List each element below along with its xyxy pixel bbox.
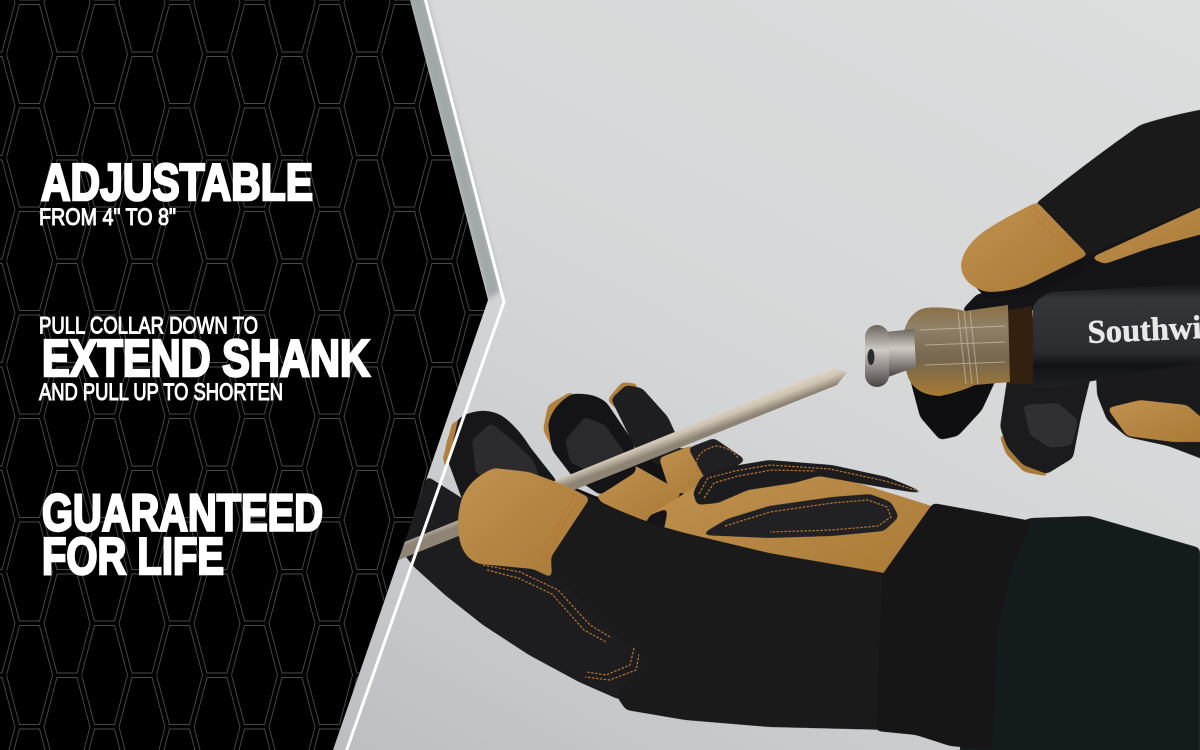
follow-on: AND PULL UP TO SHORTEN: [39, 379, 283, 406]
lower finger stitching: [483, 565, 610, 637]
heading: ADJUSTABLE: [41, 154, 313, 212]
index finger back: [1035, 108, 1200, 256]
text block: extend shank: [39, 312, 370, 406]
palm tan strip: [1090, 203, 1200, 264]
ring finger rim: [607, 382, 640, 420]
heading: EXTEND SHANK: [42, 330, 370, 388]
tip hole: [868, 349, 874, 365]
metal tip: [865, 325, 889, 387]
little finger pad: [688, 438, 746, 484]
wrist cuff: [876, 503, 1032, 750]
black handle: [1033, 284, 1200, 388]
middle finger tan: [596, 465, 682, 522]
thumb: [458, 468, 590, 578]
lower finger three tan: [1107, 400, 1200, 442]
middle finger tan rim: [543, 392, 585, 455]
middle finger black: [548, 394, 636, 495]
little finger tan strip: [659, 445, 712, 494]
shank: [396, 368, 847, 561]
upper pad stitching: [699, 465, 915, 494]
heading line one: GUARANTEED: [42, 484, 323, 542]
fingertip stitching: [1034, 208, 1080, 252]
lower finger one: [905, 360, 1005, 440]
middle finger texture: [565, 417, 630, 472]
panel: black hexagon side panel: [0, 0, 488, 750]
ring finger: [611, 385, 682, 466]
textured finger patch: [472, 423, 540, 478]
fingertip tan: [961, 202, 1088, 292]
inner palm dark fold: [642, 508, 668, 530]
text block: adjustable: [39, 154, 313, 231]
lower finger two tan edge: [998, 432, 1050, 477]
lower finger two texture: [1023, 403, 1078, 448]
thumb stitching: [541, 494, 575, 556]
black fingertip edge: [964, 255, 1088, 299]
amber shaft: [1000, 306, 1038, 384]
dark patch above handle: [960, 195, 1200, 312]
heading line two: FOR LIFE: [42, 528, 224, 586]
photo: upper gloved hand with screwdriver: [865, 108, 1200, 477]
shirt sleeve: [960, 516, 1200, 750]
lower finger three: [1095, 350, 1200, 462]
index finger: [445, 411, 562, 510]
upper black palm pad: [693, 460, 934, 505]
white chevron line: [346, 0, 504, 750]
lower pad stitching: [725, 500, 891, 532]
subheading: FROM 4" TO 8": [39, 204, 176, 231]
dark base under the fingers: [552, 448, 720, 540]
textured lower finger: [393, 476, 648, 700]
back of hand: [540, 490, 890, 730]
photo: lower gloved hand: [393, 368, 1200, 750]
finger tan edge: [443, 420, 458, 470]
clear handle: [902, 305, 1010, 396]
text block: guarantee: [42, 484, 323, 586]
tan palm: [640, 468, 935, 590]
handle ridges: [920, 311, 1005, 384]
lead-in: PULL COLLAR DOWN TO: [39, 312, 258, 340]
lower black palm pad: [700, 494, 899, 538]
lower finger two: [1000, 360, 1095, 474]
little finger stitching: [696, 446, 738, 472]
metal ferrule: [885, 329, 916, 377]
